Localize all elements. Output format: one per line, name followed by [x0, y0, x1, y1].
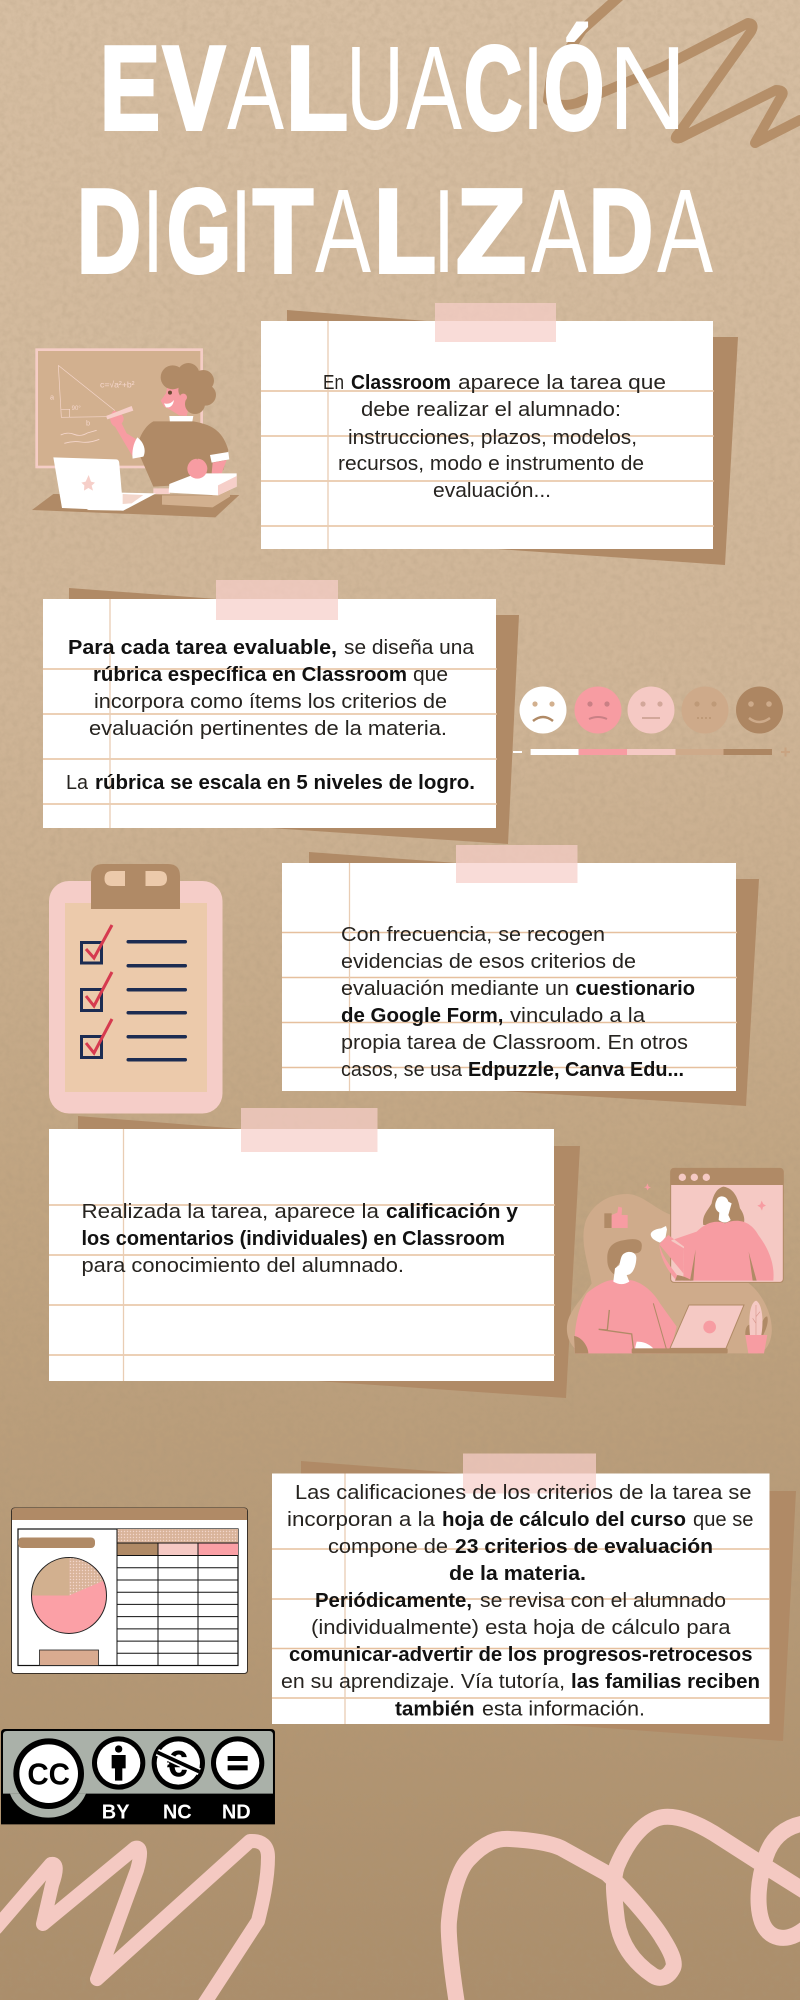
text block: cuestionario [576, 978, 695, 1000]
student [574, 1239, 677, 1353]
text block: aparece la tarea que [458, 372, 666, 394]
text block: instrucciones, plazos, modelos, [348, 427, 637, 449]
text block: Realizada la tarea, aparece la [82, 1201, 380, 1223]
hand [651, 1226, 667, 1243]
washi tape [435, 303, 556, 342]
license labels: NC [163, 1802, 192, 1824]
text block: rúbrica se escala en 5 niveles de logro. [95, 772, 475, 794]
title: C [464, 22, 522, 155]
Creative Commons BY-NC-ND badge [1, 1729, 275, 1824]
text block: propia tarea de Classroom. En otros [341, 1032, 688, 1054]
text block: Edpuzzle, Canva Edu... [468, 1059, 684, 1081]
text block: casos, se usa [341, 1059, 463, 1081]
pink scribble, bottom left [0, 1841, 268, 2000]
checkbox row 2 [82, 972, 112, 1010]
panel 4: grades and comments [49, 1108, 580, 1398]
text block: evaluación... [433, 480, 551, 502]
washi tape [463, 1454, 596, 1494]
text block: incorpora como ítems los criterios de [94, 691, 447, 713]
title: G [167, 165, 231, 298]
license labels [102, 1802, 251, 1824]
text block: se diseña una [344, 637, 475, 659]
text block: vinculado a la [510, 1005, 646, 1027]
illustration: teacher at the blackboard [32, 350, 239, 517]
text block: que [413, 664, 448, 686]
text block: se revisa con el alumnado [480, 1590, 726, 1612]
title: L [374, 165, 436, 298]
pink scribble, bottom right [449, 1817, 800, 2000]
video window [659, 1168, 783, 1282]
text block: de Google Form, [341, 1005, 504, 1027]
title: T [253, 165, 313, 298]
paper sheet [272, 1474, 770, 1724]
title: L [286, 22, 348, 155]
text block: comunicar-advertir de los progresos-retrocesos [289, 1644, 752, 1666]
text block [323, 372, 666, 502]
text block: las familias reciben [571, 1671, 760, 1693]
washi tape [241, 1108, 378, 1152]
rating faces and scale [513, 686, 790, 756]
CC symbol [13, 1738, 84, 1809]
data table [117, 1529, 238, 1666]
curly hair [161, 363, 216, 414]
title: U [346, 22, 404, 155]
title: D [77, 165, 141, 298]
face 2: sad [574, 686, 622, 734]
text block: calificación y [386, 1201, 519, 1223]
text block: en su aprendizaje. Vía tutoría, [281, 1671, 565, 1693]
title: I [230, 165, 252, 298]
face 3: neutral [628, 686, 674, 734]
pie chart [32, 1558, 106, 1634]
text block: que se [693, 1509, 754, 1531]
scale bar [513, 748, 790, 756]
text block: esta información. [482, 1698, 645, 1720]
brown scribble, top right [548, 0, 800, 143]
panel 3: evidence collection [282, 845, 759, 1106]
face 4: content [682, 686, 728, 734]
text block: Periódicamente, [315, 1590, 472, 1612]
text block: rúbrica específica en Classroom [93, 664, 407, 686]
title: A [315, 165, 371, 298]
potted plant [745, 1301, 768, 1353]
illustration: teacher at the blackboard: b [86, 418, 90, 427]
face 5: happy [736, 686, 783, 734]
text block: los comentarios (individuales) en Classroom [82, 1228, 505, 1250]
title: V [163, 22, 225, 155]
paper sheet [49, 1129, 554, 1381]
text block: compone de [328, 1536, 448, 1558]
title: I [142, 165, 164, 298]
CC symbol: CC [27, 1757, 70, 1791]
title: Z [456, 165, 526, 298]
NC icon [152, 1736, 205, 1790]
legend bar [18, 1538, 95, 1548]
thumbs-up icon [604, 1207, 628, 1228]
panel 5: course spreadsheet [272, 1454, 796, 1741]
face 1: very sad [520, 686, 566, 734]
paper sheet [282, 863, 736, 1091]
text block: evaluación pertinentes de la materia. [89, 718, 447, 740]
text block: (individualmente) esta hoja de cálculo para [311, 1617, 731, 1639]
text block [82, 1201, 519, 1277]
NC icon: € [167, 1743, 188, 1785]
title: A [531, 165, 587, 298]
BY icon [92, 1736, 145, 1790]
title: A [406, 22, 462, 155]
checkbox row 1 [82, 925, 112, 963]
title: I [433, 165, 455, 298]
ND icon [211, 1736, 264, 1790]
text block: recursos, modo e instrumento de [338, 453, 644, 475]
paper sheet [261, 321, 713, 549]
paper sheet [43, 599, 496, 828]
text block: debe realizar el alumnado: [361, 399, 621, 421]
text block: Para cada tarea evaluable, [68, 637, 337, 659]
title: D [589, 165, 653, 298]
illustration: teacher at the blackboard: c=√a²+b² [100, 379, 135, 389]
text block: también [395, 1698, 474, 1720]
text block: evidencias de esos criterios de [341, 951, 636, 973]
license labels: BY [102, 1802, 130, 1824]
text block: 23 criterios de evaluación [455, 1536, 713, 1558]
laptop [632, 1305, 744, 1353]
text block: La [66, 772, 89, 794]
text block: evaluación mediante un [341, 978, 569, 1000]
title: A [227, 22, 284, 155]
illustration: video call between teacher and student [567, 1168, 783, 1353]
title: Ó [544, 22, 604, 155]
text block [66, 637, 475, 794]
panel 1: Classroom task [261, 303, 738, 565]
title: A [657, 165, 713, 298]
washi tape [216, 580, 338, 620]
washi tape [456, 845, 578, 883]
illustration: teacher at the blackboard: 90° [72, 406, 81, 412]
checkbox row 3 [82, 1019, 112, 1058]
illustration: clipboard checklist [49, 864, 222, 1114]
text block: Classroom [351, 372, 451, 394]
title [77, 22, 713, 298]
title: E [100, 22, 160, 155]
text block: Con frecuencia, se recogen [341, 924, 605, 946]
text block [341, 924, 695, 1081]
illustration: spreadsheet with pie chart [12, 1508, 248, 1674]
text block: hoja de cálculo del curso [442, 1509, 686, 1531]
title: I [522, 22, 544, 155]
panel 2: rubric [43, 580, 519, 844]
text block: de la materia. [449, 1563, 586, 1585]
illustration: teacher at the blackboard: a [50, 392, 55, 401]
text block [281, 1482, 760, 1720]
license labels: ND [222, 1802, 251, 1824]
title: N [608, 22, 687, 155]
text block: incorporan a la [287, 1509, 436, 1531]
text block: Las calificaciones de los criterios de la tarea se [295, 1482, 752, 1504]
text block: para conocimiento del alumnado. [82, 1255, 404, 1277]
text block: En [323, 372, 344, 394]
